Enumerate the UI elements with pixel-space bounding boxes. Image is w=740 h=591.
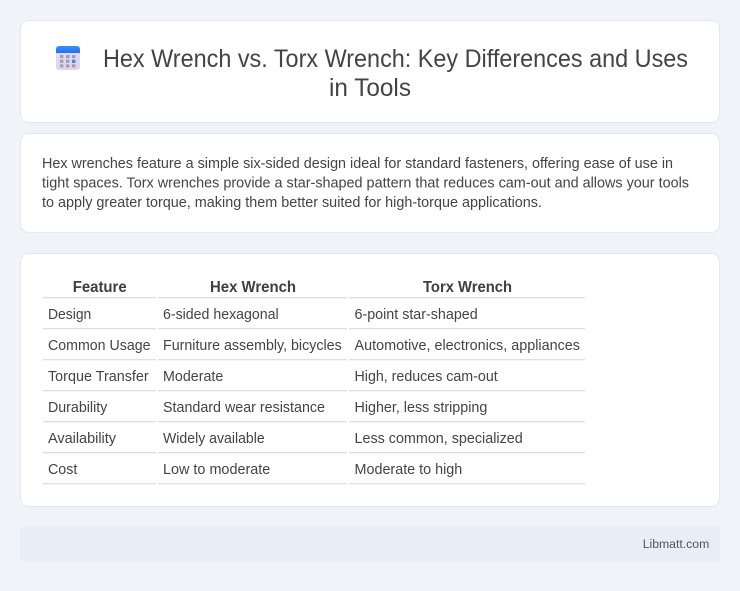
row: durability: Higher, less stripping: [354, 400, 487, 416]
row: common usage: Automotive, electronics, appliances: [354, 338, 580, 354]
row: cost: Low to moderate: [163, 462, 270, 478]
row: availability: Availability: [48, 431, 117, 447]
row: torque transfer: High, reduces cam-out: [354, 369, 498, 385]
footer: Libmatt.com: [643, 537, 709, 551]
intro paragraph: to apply greater torque, making them better suited for high-torque applications.: [42, 195, 542, 211]
panel: header: [20, 20, 720, 122]
row: design: 6-point star-shaped: [354, 307, 478, 323]
title: [103, 46, 688, 102]
intro paragraph: Hex wrenches feature a simple six-sided design ideal for standard fasteners, offering ease of use in: [42, 156, 673, 172]
row: common usage: [48, 338, 580, 354]
row: availability: Less common, specialized: [354, 431, 523, 447]
table header row: Torx Wrench: [423, 279, 512, 296]
row: cost: [48, 462, 462, 478]
title: Hex Wrench vs. Torx Wrench: Key Differences and Uses: [103, 46, 688, 73]
row: design: Design: [48, 307, 91, 323]
panel: introduction: [20, 134, 720, 232]
title: in Tools: [329, 75, 411, 102]
row: torque transfer: [48, 369, 498, 385]
row: durability: Durability: [48, 400, 108, 416]
table header row: Hex Wrench: [210, 279, 296, 296]
intro paragraph: [42, 156, 689, 211]
table rules: [43, 297, 585, 484]
row: common usage: Common Usage: [48, 338, 150, 354]
intro paragraph: tight spaces. Torx wrenches provide a star-shaped pattern that reduces cam-out and allows your tools: [42, 176, 689, 192]
panel: comparison table: [20, 254, 720, 506]
row: torque transfer: Torque Transfer: [48, 369, 149, 385]
row: cost: Moderate to high: [354, 462, 462, 478]
row: durability: [48, 400, 487, 416]
footer: [20, 527, 720, 561]
table header row: Feature: [73, 279, 127, 296]
row: design: 6-sided hexagonal: [163, 307, 279, 323]
row: torque transfer: Moderate: [163, 369, 223, 385]
icon: calendar: [56, 46, 80, 70]
row: design: [48, 307, 478, 323]
row: cost: Cost: [48, 462, 77, 478]
row: common usage: Furniture assembly, bicycles: [163, 338, 342, 354]
row: durability: Standard wear resistance: [163, 400, 325, 416]
row: availability: [48, 431, 523, 447]
table header row: [73, 279, 512, 296]
row: availability: Widely available: [163, 431, 265, 447]
